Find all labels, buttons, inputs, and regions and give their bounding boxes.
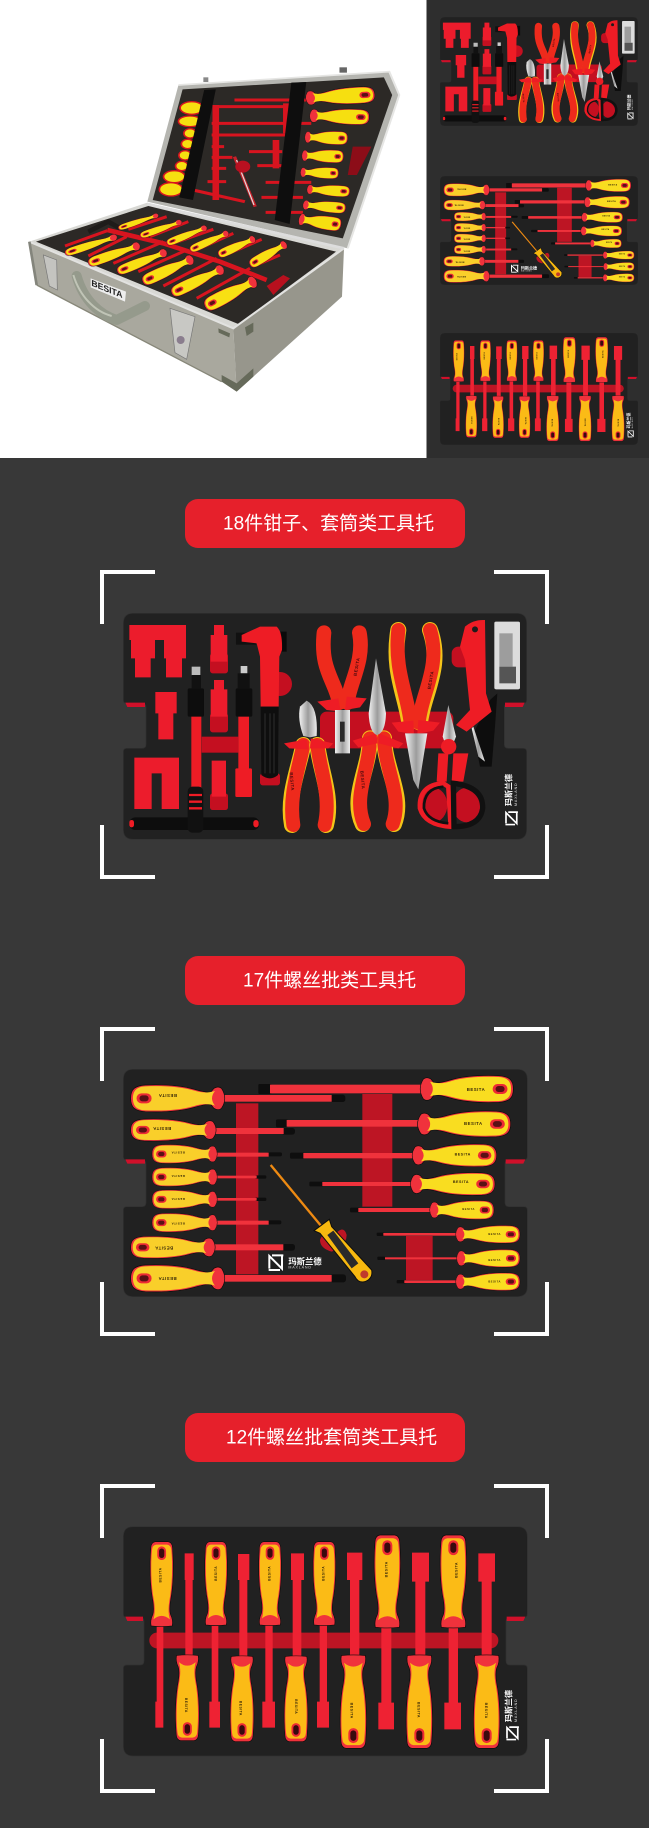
- right column handles: [411, 1075, 520, 1291]
- heading: screwdriver tray: [185, 956, 465, 1005]
- illustration: open tool case: [29, 67, 399, 392]
- handle brand text: BESITA: [384, 1561, 388, 1577]
- sockets: [129, 625, 227, 809]
- long nose pliers: [353, 658, 403, 824]
- logo: [269, 1255, 322, 1270]
- handle brand text: BESITA: [488, 1232, 501, 1236]
- handle brand text: BESITA: [462, 1207, 475, 1211]
- handle brand text: BESITA: [154, 1245, 173, 1250]
- handle brand text: BESITA: [484, 1703, 488, 1719]
- case handle: [73, 275, 145, 320]
- handle brand text: [152, 1087, 501, 1283]
- logo: MAXLAND: [288, 1266, 312, 1270]
- corner brackets: tray 3: [100, 1484, 549, 1793]
- heading: screwdriver tray: 17件螺丝批类工具托: [243, 970, 416, 992]
- upper handles: [150, 1535, 467, 1628]
- case base: [29, 203, 344, 392]
- vertical logo: MAXLAND: [514, 782, 518, 806]
- handle brand text: BESITA: [488, 1258, 501, 1262]
- handle brand text: BESITA: [158, 1276, 177, 1281]
- handle brand text: BESITA: [455, 1152, 471, 1156]
- shafts and sockets: [155, 1553, 495, 1729]
- base foam tools: [64, 212, 290, 313]
- red foam strips: [236, 1094, 433, 1280]
- heading: socket driver tray: 12件螺丝批套筒类工具托: [226, 1426, 437, 1448]
- handle brand text: BESITA: [467, 1087, 486, 1092]
- handle brand text: BESITA: [238, 1701, 242, 1716]
- panel: pliers and socket tray: [123, 613, 527, 839]
- case lid: [147, 67, 399, 248]
- ratchet: [236, 627, 287, 778]
- vertical logo: MAXLAND: [514, 1698, 518, 1722]
- thumbnail: pliers tray: [440, 17, 638, 126]
- handle brand text: BESITA: [171, 1174, 185, 1178]
- case latches: [43, 255, 195, 359]
- voltage tester: [271, 1165, 372, 1282]
- stripping pliers: BESITA: [353, 657, 361, 676]
- logo: 玛斯兰德: [288, 1256, 322, 1266]
- handle brand text: BESITA: [417, 1702, 421, 1718]
- vertical logo: 玛斯兰德: [503, 1690, 513, 1722]
- handle brand text: BESITA: [171, 1151, 185, 1155]
- combination pliers: [392, 630, 440, 789]
- blade pack: [494, 622, 520, 689]
- long nose pliers: BESITA: [359, 771, 366, 790]
- panel: product photo white background: [0, 0, 426, 458]
- handle brand text: BESITA: [349, 1703, 353, 1719]
- handle brand text: BESITA: [171, 1221, 185, 1225]
- lid tools: [159, 82, 375, 232]
- combination pliers: BESITA: [427, 670, 435, 690]
- heading: pliers tray: [185, 499, 465, 548]
- handle brand text: BESITA: [171, 1197, 185, 1201]
- screwdriver tips and shafts: [214, 1084, 458, 1283]
- cutting pliers: [284, 701, 333, 825]
- vertical logo: 玛斯兰德: [504, 774, 514, 806]
- panel: overview strip background: [426, 0, 649, 458]
- case body: [29, 203, 344, 392]
- lower handles: [175, 1655, 500, 1748]
- heading: pliers tray: 18件钳子、套筒类工具托: [223, 512, 434, 534]
- cutting pliers: BESITA: [289, 772, 295, 791]
- handle brand text: BESITA: [455, 1562, 459, 1578]
- handle brand text: BESITA: [294, 1699, 298, 1714]
- handle brand text: BESITA: [322, 1566, 326, 1581]
- cable knife: [456, 620, 497, 767]
- thumbnail: screwdriver tray: [440, 176, 638, 285]
- case brand text: BESITA: [91, 278, 123, 300]
- corner brackets: tray 1: [100, 570, 549, 879]
- handle brand text: BESITA: [158, 1093, 177, 1098]
- red foam band: [149, 1633, 498, 1648]
- handle brand text: BESITA: [464, 1121, 483, 1126]
- handle brand text: [159, 1561, 488, 1719]
- handle brand text: BESITA: [268, 1566, 272, 1581]
- handle brand text: BESITA: [184, 1698, 188, 1713]
- handle brand text: BESITA: [214, 1566, 218, 1581]
- vertical logo: [504, 774, 518, 825]
- vertical logo: [503, 1690, 519, 1740]
- handle brand text: BESITA: [159, 1567, 163, 1582]
- handle brand text: BESITA: [152, 1126, 171, 1131]
- handle brand text: BESITA: [453, 1180, 469, 1184]
- corner brackets: tray 2: [100, 1027, 549, 1336]
- handle brand text: BESITA: [488, 1279, 501, 1283]
- red foam: [202, 647, 481, 822]
- heading: socket driver tray: [185, 1413, 465, 1462]
- scissors: [420, 705, 483, 827]
- extension bars and T-handle: [129, 666, 259, 833]
- panel: socket screwdriver tray: [123, 1527, 527, 1756]
- panel: screwdriver tray: [123, 1069, 527, 1297]
- thumbnail: socket driver tray: [440, 333, 638, 445]
- left column handles: [131, 1085, 225, 1292]
- stripping pliers: [317, 633, 367, 753]
